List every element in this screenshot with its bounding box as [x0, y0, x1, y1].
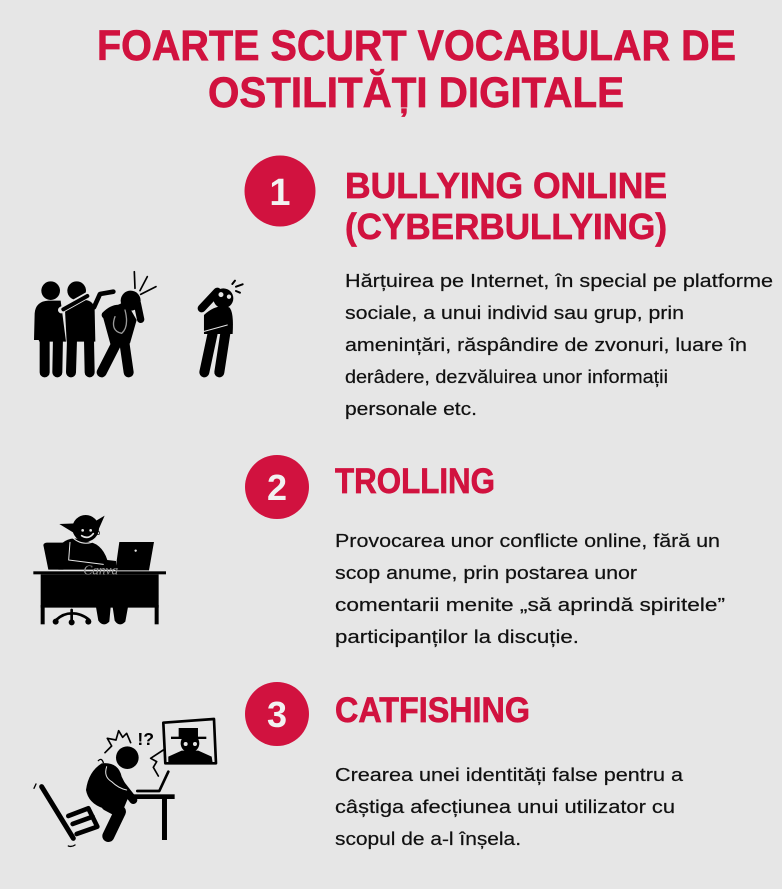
title: FOARTE SCURT VOCABULAR DE [97, 22, 736, 70]
icon: startled person at desk and masked figure on screen: !? [137, 729, 154, 749]
text: bullying definition [345, 271, 773, 419]
text: catfishing definition: scopul de a-l înșela. [335, 829, 521, 849]
panel: bullying online [34, 156, 773, 419]
text: bullying definition: Hărțuirea pe Internet, în special pe platforme [345, 271, 773, 291]
heading: trolling: TROLLING [335, 462, 495, 501]
text: catfishing definition [335, 765, 684, 849]
icon: troll at desk with laptop: Canva [83, 562, 118, 577]
icon: startled person at desk and masked figure on screen [34, 719, 216, 846]
heading: bullying online: BULLYING ONLINE [345, 165, 667, 206]
heading: bullying online [345, 165, 667, 247]
text: trolling definition: Provocarea unor conflicte online, fără un [335, 531, 720, 551]
text: trolling definition: scop anume, prin postarea unor [335, 563, 637, 583]
panel: catfishing [34, 682, 684, 849]
heading: bullying online: (CYBERBULLYING) [345, 206, 667, 247]
icon: troll at desk with laptop [33, 515, 166, 625]
text: bullying definition: personale etc. [345, 399, 477, 419]
number badge 3: 3 [267, 694, 287, 735]
text: catfishing definition: câștiga afecțiunea unui utilizator cu [335, 797, 675, 817]
panel: trolling [33, 455, 725, 647]
text: catfishing definition: Crearea unei identități false pentru a [335, 765, 684, 785]
text: trolling definition [335, 531, 725, 647]
icon: group mocking a person and victim [34, 272, 243, 372]
number badge 1 [244, 156, 316, 226]
number badge 1: 1 [269, 172, 291, 214]
text: bullying definition: sociale, a unui individ sau grup, prin [345, 303, 684, 323]
title [97, 22, 736, 117]
text: trolling definition: participanților la discuție. [335, 627, 579, 647]
number badge 2 [245, 455, 309, 519]
text: trolling definition: comentarii menite „să aprindă spiritele” [335, 595, 725, 615]
number badge 2: 2 [267, 467, 287, 508]
title: OSTILITĂȚI DIGITALE [208, 69, 624, 117]
number badge 3 [245, 682, 309, 746]
text: bullying definition: derâdere, dezvăluirea unor informații [345, 367, 668, 387]
text: bullying definition: amenințări, răspândire de zvonuri, luare în [345, 335, 747, 355]
heading: catfishing: CATFISHING [335, 691, 530, 730]
